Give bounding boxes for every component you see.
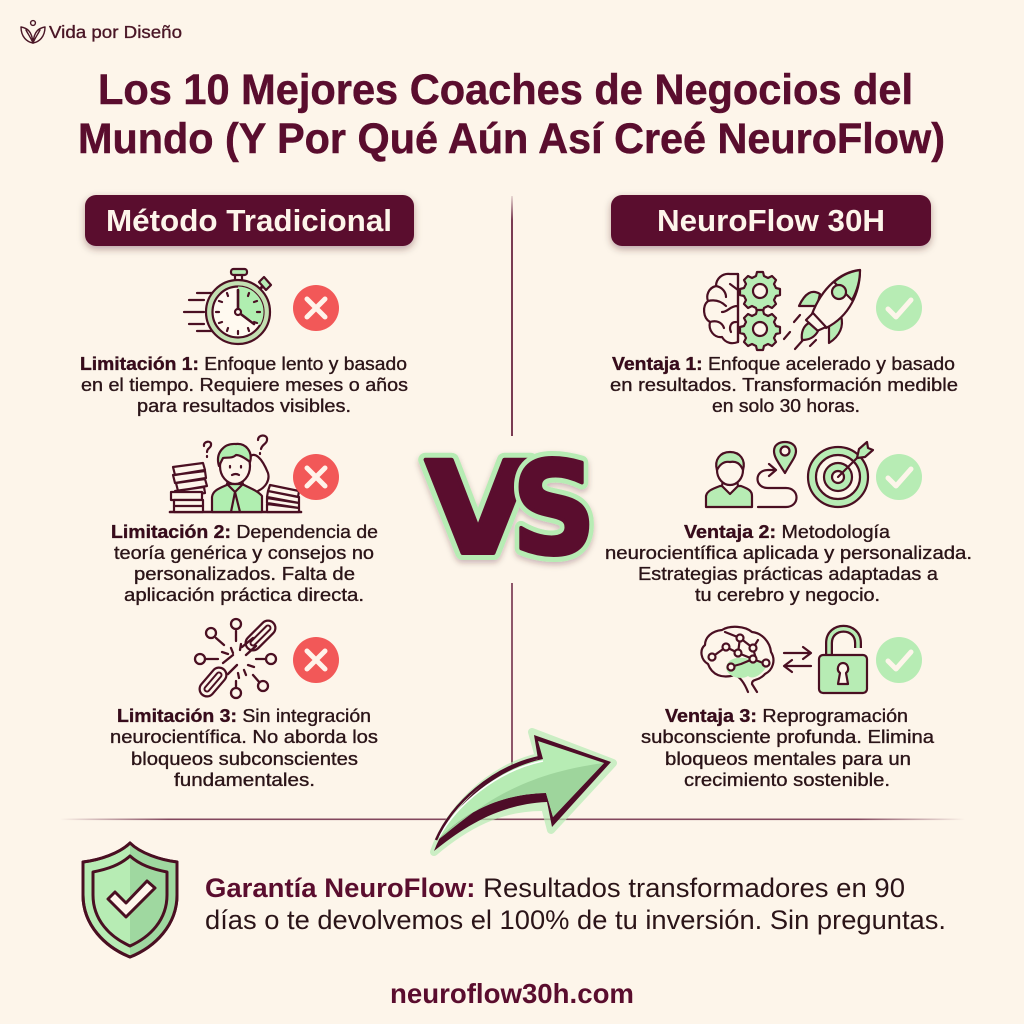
brand name: Vida por Diseño [49,22,182,42]
panel: advantage 3 [641,627,935,790]
text: advantage 3: bloqueos mentales para un [665,749,911,769]
text: advantage 1 [610,354,958,416]
text: limitation 2: Limitación 2: Dependencia de [111,522,378,542]
text: limitation 2: aplicación práctica directa. [124,585,364,605]
text: limitation 3: Limitación 3: Sin integración [117,706,371,726]
heading pill: NeuroFlow 30H: NeuroFlow 30H [657,203,885,238]
title: Los 10 Mejores Coaches de Negocios del [98,66,913,114]
icon: brain with gears [704,272,780,350]
guarantee text [205,873,946,935]
text: limitation 2 [111,522,378,605]
guarantee text: días o te devolvemos el 100% de tu inversión. Sin preguntas. [205,905,946,935]
icon: open padlock [819,629,867,693]
text: advantage 3 [641,706,935,790]
icon: route with pin [758,442,796,507]
heading pill: NeuroFlow 30H [611,195,931,246]
text: limitation 2: personalizados. Falta de [134,564,355,584]
text: advantage 1: en solo 30 horas. [712,396,860,416]
text: limitation 2: teoría genérica y consejos no [114,543,374,563]
website url: neuroflow30h.com [390,978,634,1009]
icon: target with arrow [808,442,873,507]
text: limitation 1 [80,354,408,416]
icon: leaf person [21,21,45,43]
heading pill: Método Tradicional [85,195,414,246]
icon: brain circuit [701,627,773,692]
panel: limitation 1 [80,269,408,416]
text: advantage 2: neurocientífica aplicada y personalizada. [605,543,972,563]
icon: red cross [293,454,339,500]
icon: red cross [293,285,339,331]
guarantee text: Garantía NeuroFlow: Resultados transformadores en 90 [205,873,905,903]
VS badge: V [425,435,531,584]
heading pill: Método Tradicional: Método Tradicional [106,203,392,238]
text: advantage 2: Estrategias prácticas adaptadas a [638,564,939,584]
text: limitation 3: bloqueos subconscientes [131,749,358,769]
icon: confused person with stacks of paper [170,436,301,512]
text: advantage 3: Ventaja 3: Reprogramación [665,706,908,726]
icon: person [706,452,752,507]
text: advantage 3: crecimiento sostenible. [684,770,890,790]
lower link [207,675,219,689]
text: advantage 1: Ventaja 1: Enfoque acelerado y basado [612,354,955,374]
icon: green check [876,637,922,683]
text: limitation 1: en el tiempo. Requiere meses o años [81,375,408,395]
icon: green check [876,454,922,500]
text: advantage 2: Ventaja 2: Metodología [684,522,891,542]
text: limitation 1: para resultados visibles. [137,396,351,416]
VS badge [425,435,596,584]
panel: advantage 1 [610,270,958,416]
text: advantage 2: tu cerebro y negocio. [695,585,880,605]
logo: Vida por Diseño [21,21,182,43]
title: Mundo (Y Por Qué Aún Así Creé NeuroFlow) [78,115,945,163]
text: limitation 3: neurocientífica. No aborda los [110,727,378,747]
text: advantage 1: en resultados. Transformación medible [610,375,958,395]
VS badge: S [512,435,596,584]
text: limitation 3: fundamentales. [174,770,315,790]
text: advantage 2 [605,522,972,605]
icon: bidirectional arrows [784,647,811,672]
arrow [434,732,613,852]
guarantee shield icon [83,843,177,957]
VS badge: V [425,435,531,584]
title [78,66,945,163]
panel: limitation 2 [111,436,378,605]
icon: green check [876,285,922,331]
panel: advantage 2 [605,442,972,605]
icon: rocket [784,270,860,349]
icon: broken chain with nodes [195,619,276,698]
text: limitation 1: Limitación 1: Enfoque lento y basado [80,354,407,374]
text: advantage 3: subconsciente profunda. Elimina [641,727,935,747]
icon: red cross [293,637,339,683]
text: limitation 3 [110,706,378,790]
upper link [253,628,268,643]
VS badge: S [512,435,596,584]
icon: stopwatch [184,269,271,344]
panel: limitation 3 [110,619,378,790]
